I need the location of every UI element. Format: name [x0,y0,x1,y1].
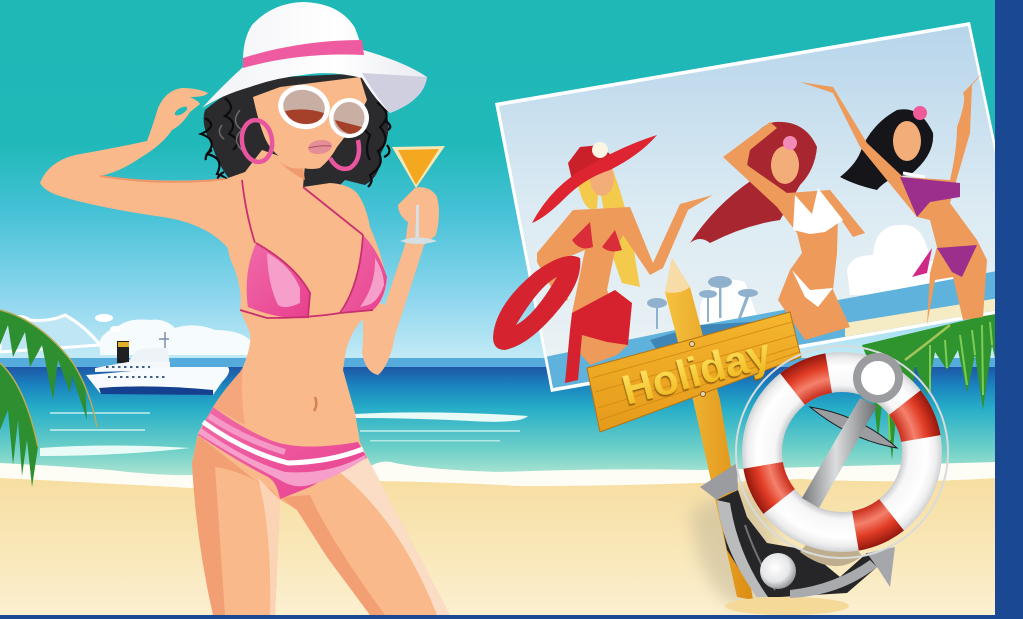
hair [201,73,390,200]
neck shadow [268,150,305,180]
torso and legs [192,150,450,615]
lips [307,138,333,156]
surf foam [0,462,998,488]
anchor ball [760,553,796,589]
photo figure: woman in red hat [493,135,713,383]
sea [0,367,1000,477]
pink bikini top [240,180,387,318]
cocktail glass [392,146,445,244]
face [253,77,367,169]
photo figure: red-haired woman [690,122,865,340]
side bar [995,0,1023,619]
photo figure: dark-haired woman [800,68,987,325]
wave highlights [40,412,528,456]
anchor crossbar [810,407,897,448]
anchor shadow on sand [690,480,790,605]
bikini bottom [198,407,367,499]
anchor ring [857,357,899,399]
distant sea band [0,358,1000,368]
bottom bar [0,615,1023,619]
near arm [362,187,439,375]
anchor shank [802,398,877,508]
hat [202,2,427,113]
palm leaves: left [0,310,97,487]
anchor flukes [700,463,895,598]
signpost [587,258,801,605]
sand mound [725,597,849,615]
ship [86,332,229,395]
sand [0,478,1000,618]
lifebuoy ring [736,346,948,558]
background: sky [0,0,1023,370]
holiday board [587,312,801,432]
body shading [192,435,280,615]
clouds [0,314,254,355]
main figure: woman with cocktail [40,2,450,615]
raised arm [40,88,235,258]
hoop earrings [239,118,359,169]
palm leaves: right [862,312,1000,462]
postcard [493,22,995,392]
sunglasses [274,80,373,142]
anchor and lifebuoy [700,346,948,615]
holiday label: Holiday [617,329,776,414]
